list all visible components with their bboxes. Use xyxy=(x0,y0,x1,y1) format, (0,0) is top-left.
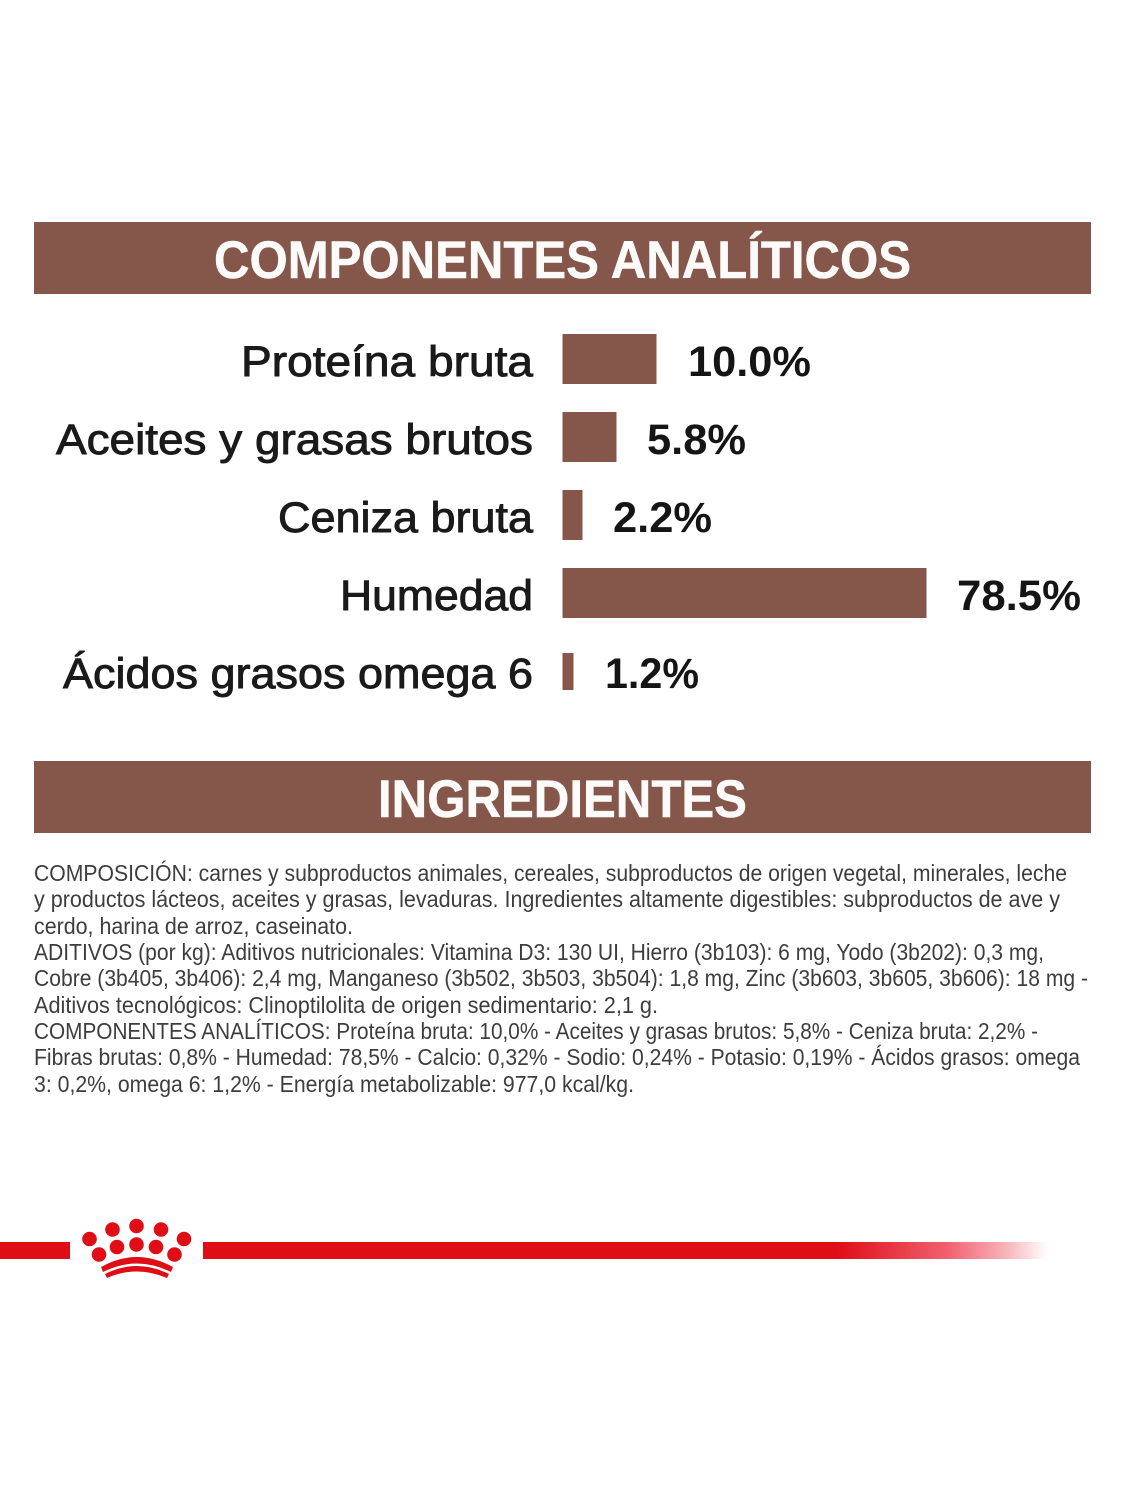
icon: crown logo xyxy=(82,1219,191,1278)
row: humedad: Humedad xyxy=(340,572,533,620)
text block: composition: ADITIVOS (por kg): Aditivos nutricionales: Vitamina D3: 130 UI, Hierro (3b103): 6 mg, Yodo (3b202): 0,3 mg, xyxy=(34,939,1044,965)
text block: composition: Aditivos tecnológicos: Clinoptilolita de origen sedimentario: 2,1 g. xyxy=(34,992,658,1018)
row: aceites y grasas brutos: Aceites y grasas brutos xyxy=(56,416,533,464)
text block: composition: COMPONENTES ANALÍTICOS: Proteína bruta: 10,0% - Aceites y grasas brutos: 5,8% - Ceniza bruta: 2,2% - xyxy=(34,1018,1038,1044)
row: humedad xyxy=(340,568,1081,620)
text block: composition: cerdo, harina de arroz, caseinato. xyxy=(34,913,353,939)
row: ácidos grasos omega 6: 1.2% xyxy=(605,650,699,698)
row: proteína bruta: Proteína bruta xyxy=(241,338,533,386)
text block: composition: 3: 0,2%, omega 6: 1,2% - Energía metabolizable: 977,0 kcal/kg. xyxy=(34,1071,634,1097)
heading: componentes analíticos xyxy=(34,222,1091,294)
heading: ingredientes xyxy=(34,761,1091,833)
row: ceniza bruta: 2.2% xyxy=(613,494,712,542)
row: proteína bruta xyxy=(241,334,811,386)
text block: composition xyxy=(34,860,1088,1097)
brand line: red rule left xyxy=(0,1242,70,1259)
heading: ingredientes: INGREDIENTES xyxy=(378,770,747,829)
text block: composition: y productos lácteos, aceites y grasas, levaduras. Ingredientes altamente digestibles: subproductos de ave y xyxy=(34,886,1060,912)
row: aceites y grasas brutos: 5.8% xyxy=(647,416,746,464)
heading: componentes analíticos: COMPONENTES ANALÍTICOS xyxy=(214,230,911,290)
row: ceniza bruta xyxy=(278,490,712,542)
row: humedad: 78.5% xyxy=(957,572,1081,620)
row: aceites y grasas brutos xyxy=(56,412,746,464)
row: ácidos grasos omega 6: Ácidos grasos omega 6 xyxy=(63,650,533,698)
row: ceniza bruta: Ceniza bruta xyxy=(278,494,533,542)
bar chart: analytical components xyxy=(56,334,1081,698)
row: proteína bruta: 10.0% xyxy=(688,338,811,386)
text block: composition: COMPOSICIÓN: carnes y subproductos animales, cereales, subproductos de origen vegetal, minerales, leche xyxy=(34,860,1067,886)
brand line: red rule right with fade xyxy=(203,1242,1048,1259)
